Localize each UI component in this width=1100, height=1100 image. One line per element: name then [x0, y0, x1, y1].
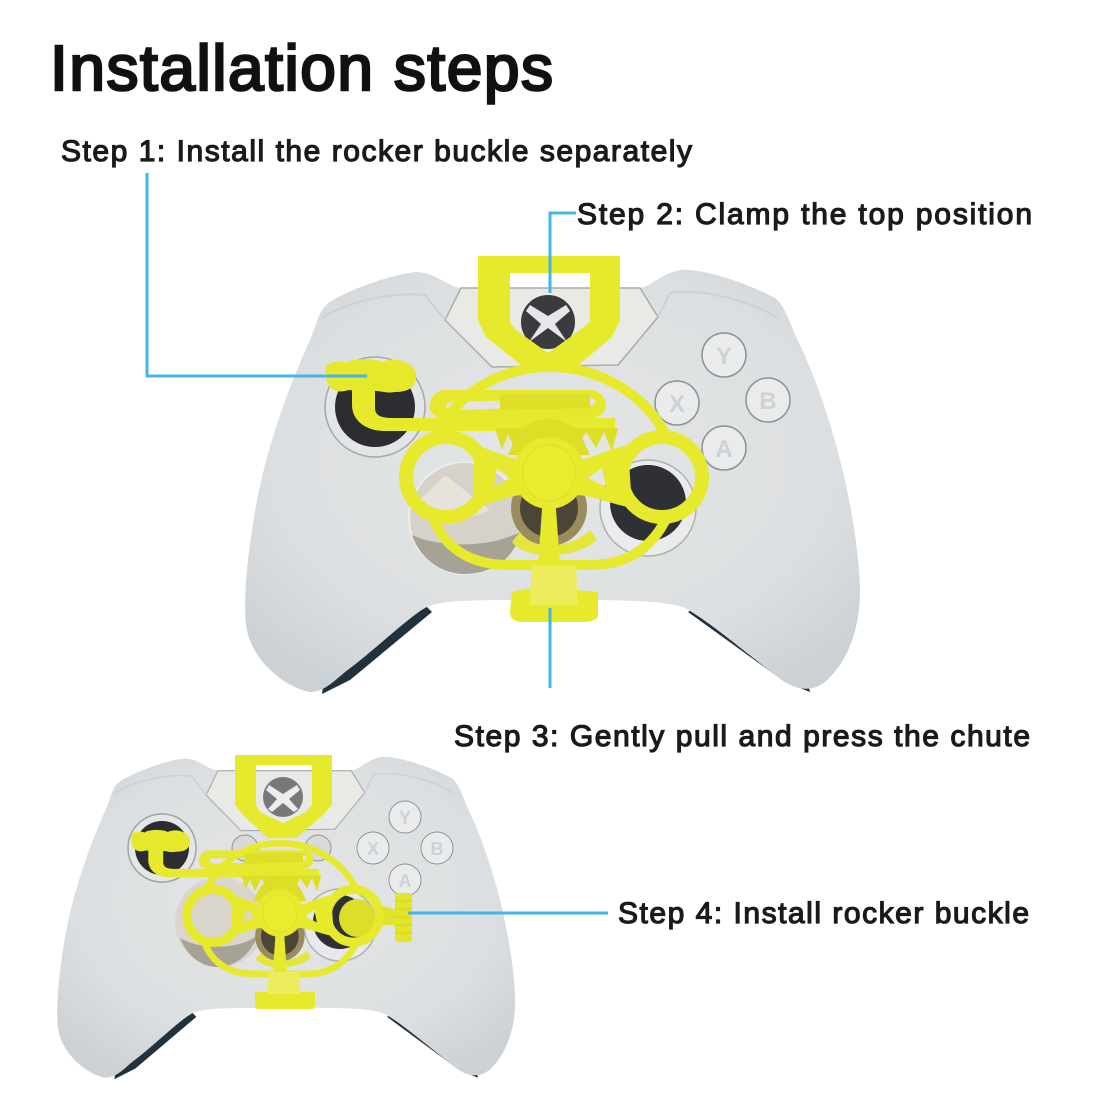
face buttons: X [367, 839, 379, 859]
xbox guide button [521, 295, 575, 349]
title: Installation steps [50, 32, 553, 104]
face buttons: A [398, 871, 412, 891]
face buttons: B [759, 388, 777, 415]
top clamp [235, 755, 332, 838]
rocker buckle and rack [326, 359, 618, 452]
small controller with installed buckle [57, 755, 515, 1079]
step 3 label: Step 3: Gently pull and press the chute [454, 720, 1030, 753]
rocker buckle on right stick [339, 893, 412, 942]
face buttons: Y [399, 808, 411, 828]
mini steering wheel [406, 367, 702, 565]
mini steering wheel [187, 843, 379, 974]
face buttons: X [669, 391, 685, 418]
menu buttons [232, 835, 331, 861]
rocker buckle and rack [131, 830, 321, 891]
leader line: step 4 [408, 912, 608, 914]
face buttons [655, 333, 790, 470]
leader line: step 2 [550, 213, 576, 293]
xbox guide button [263, 777, 303, 817]
d-pad [409, 462, 521, 574]
face buttons: A [715, 436, 733, 463]
face buttons: B [430, 839, 444, 859]
step 1 label: Step 1: Install the rocker buckle separately [61, 135, 692, 168]
right thumbstick [600, 460, 696, 556]
right thumbstick [304, 889, 376, 961]
bottom chute tab [255, 972, 315, 1009]
step 2 label: Step 2: Clamp the top position [577, 198, 1032, 231]
top clamp [478, 256, 620, 372]
step 4 label: Step 4: Install rocker buckle [618, 897, 1029, 930]
face buttons: Y [716, 343, 732, 370]
bottom chute tab [510, 565, 598, 622]
d-pad [175, 877, 265, 967]
face buttons [357, 801, 453, 896]
large controller with mini wheel [245, 256, 860, 694]
leader line: step 1 [147, 173, 367, 376]
left thumbstick [325, 357, 425, 457]
left thumbstick [128, 814, 196, 882]
leader line: step 3 [548, 608, 552, 688]
